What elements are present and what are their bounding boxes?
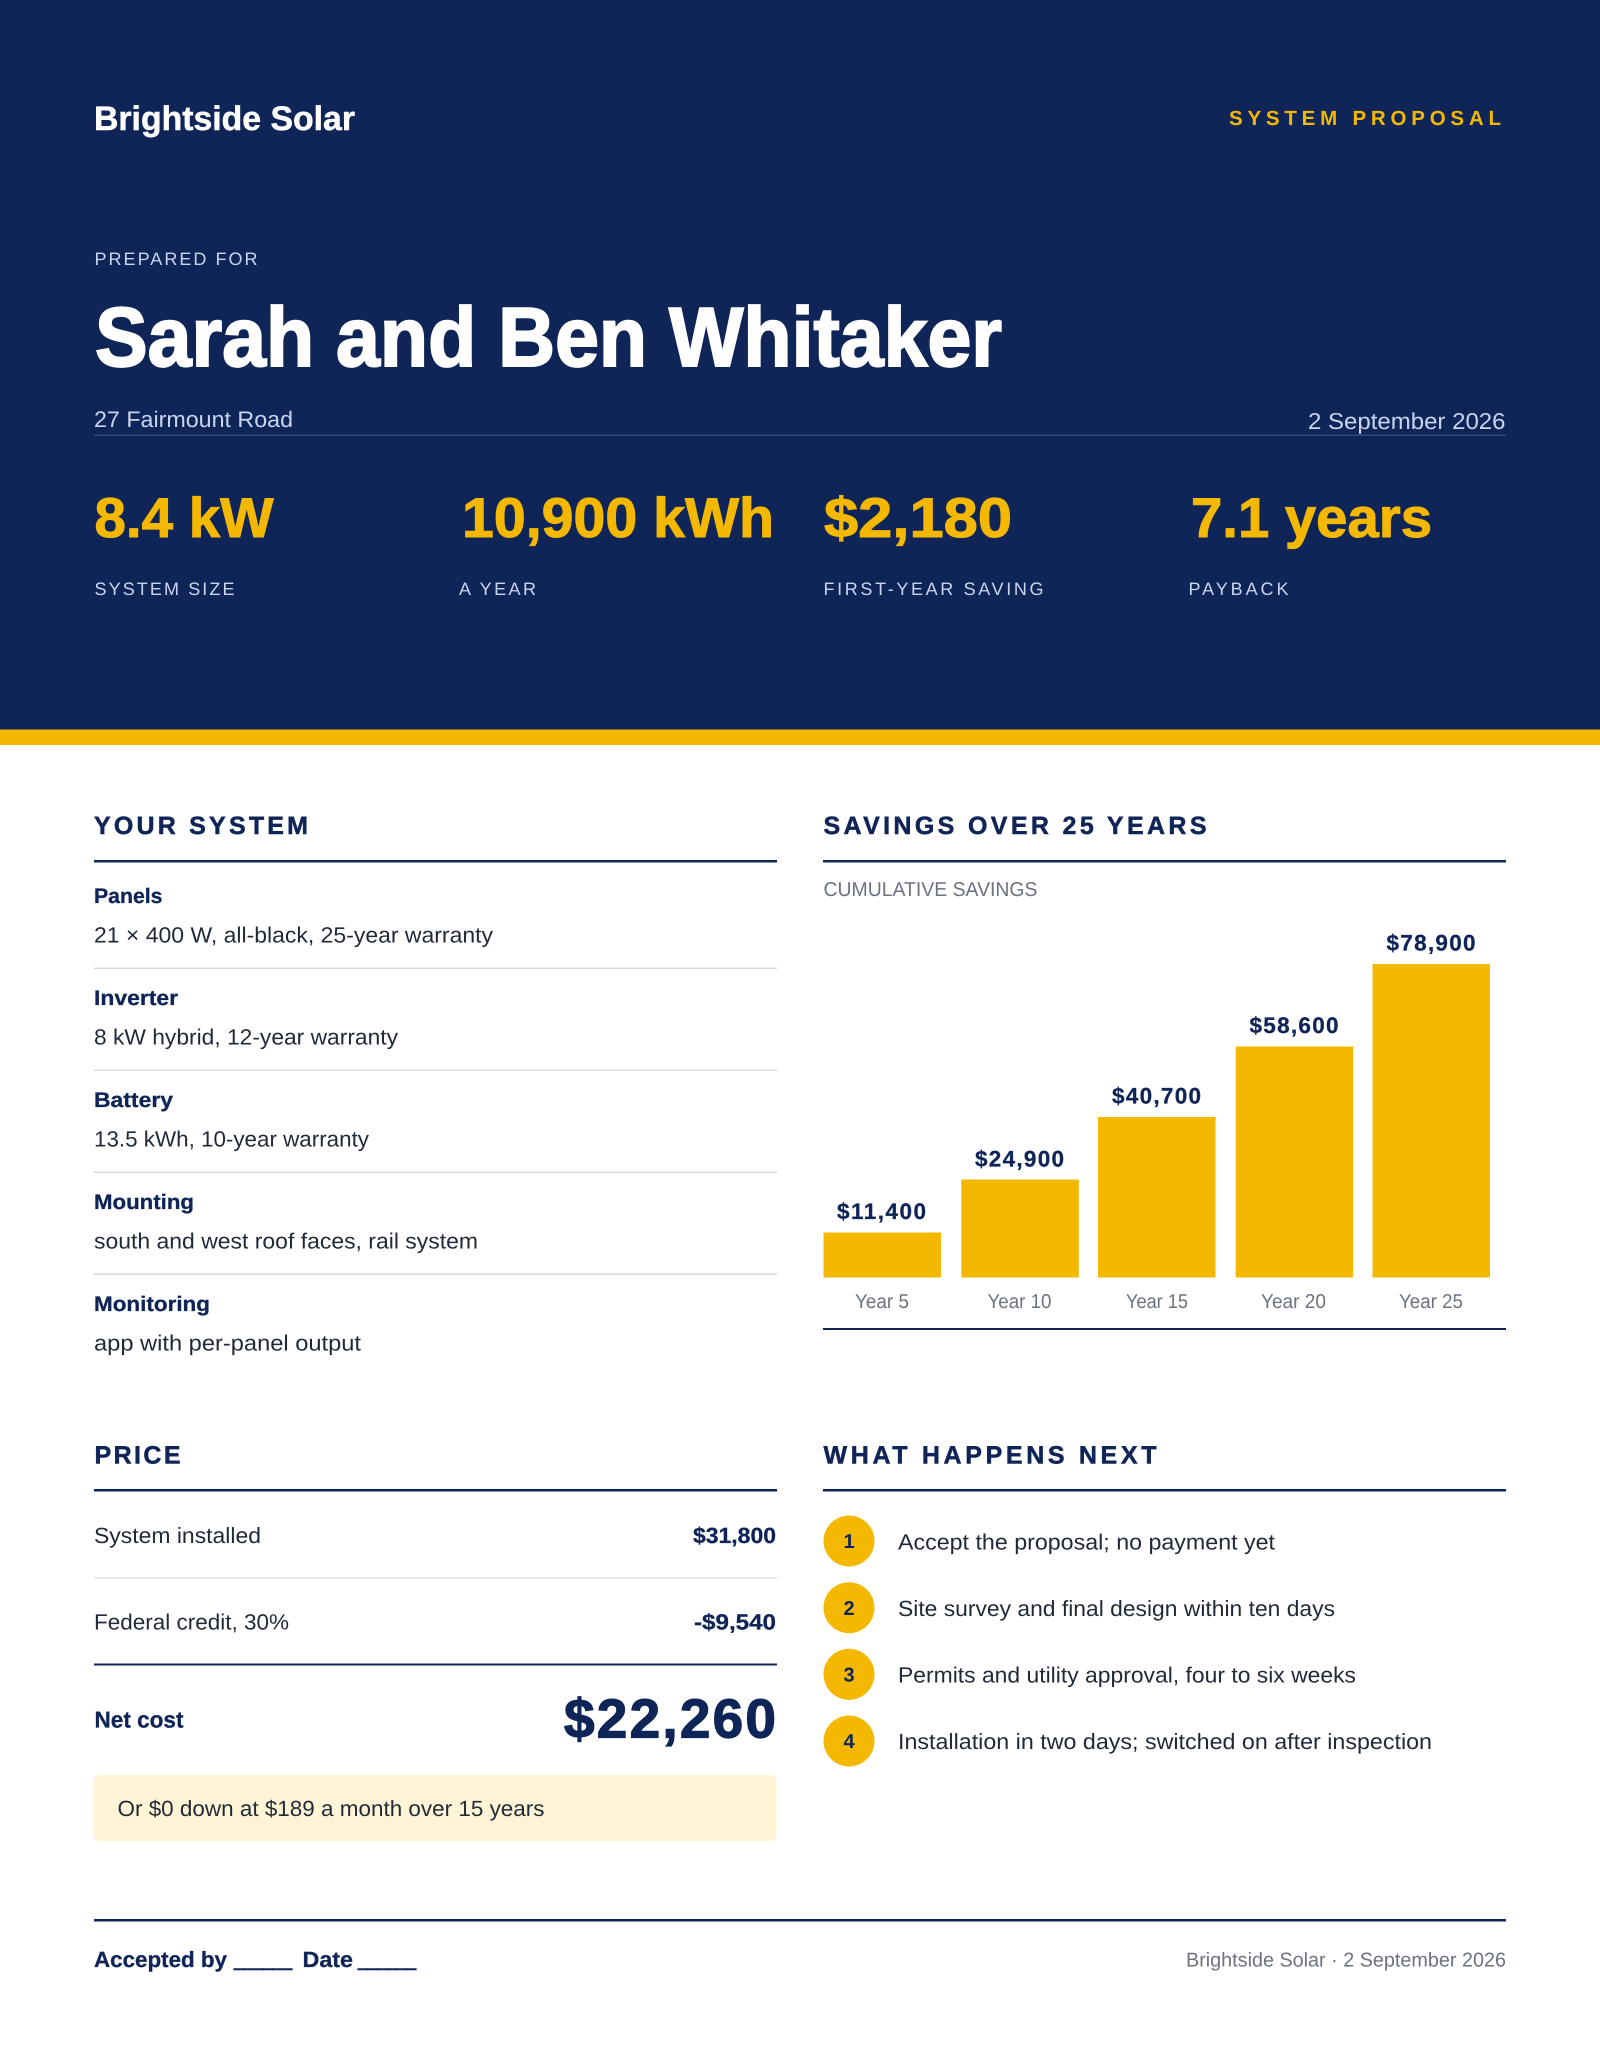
- line item: federal credit: -$9,540: [694, 1610, 776, 1634]
- spec: panels: 21 × 400 W, all-black, 25-year warranty: [94, 922, 493, 948]
- bar: year 20: [1236, 1013, 1353, 1313]
- heading: savings: SAVINGS OVER 25 YEARS: [824, 812, 1206, 840]
- bar: year 10: $24,900: [975, 1146, 1064, 1172]
- line item: system installed: [94, 1523, 776, 1548]
- customer name: Sarah and Ben Whitaker: [95, 290, 1002, 384]
- bar chart: [824, 930, 1490, 1313]
- stat: annual output: [459, 486, 774, 599]
- heading: your system: YOUR SYSTEM: [94, 812, 308, 840]
- spec: inverter: 8 kW hybrid, 12-year warranty: [94, 1024, 398, 1050]
- stat: annual output: A YEAR: [459, 579, 536, 599]
- spec: panels: [94, 885, 493, 948]
- stat: system size: SYSTEM SIZE: [94, 579, 234, 599]
- stat: payback: PAYBACK: [1188, 579, 1288, 599]
- bar: year 10: [961, 1146, 1079, 1313]
- panel: savings over 25 years: [823, 812, 1506, 1330]
- chart subtitle: CUMULATIVE SAVINGS: [824, 879, 1038, 901]
- step 3: Permits and utility approval, four to six weeks: [898, 1663, 1356, 1688]
- step 2: [824, 1582, 1335, 1633]
- bar: year 5: $11,400: [837, 1199, 926, 1224]
- panel: your system: [94, 812, 777, 1356]
- step 4: [824, 1716, 1432, 1766]
- step 1: 1: [843, 1531, 855, 1553]
- bar: year 15: Year 15: [1126, 1291, 1188, 1313]
- line item: federal credit: Federal credit, 30%: [94, 1610, 289, 1634]
- prepared for label: PREPARED FOR: [94, 249, 258, 269]
- spec: mounting: [94, 1191, 478, 1254]
- stat: first-year saving: [824, 486, 1044, 599]
- financing callout: Or $0 down at $189 a month over 15 years: [118, 1796, 544, 1821]
- stat: system size: 8.4 kW: [94, 486, 274, 549]
- bar: year 15: $40,700: [1112, 1084, 1201, 1108]
- step 2: 2: [843, 1598, 855, 1620]
- step 3: [824, 1649, 1356, 1700]
- document type label: SYSTEM PROPOSAL: [1229, 107, 1501, 130]
- step 4: Installation in two days; switched on after inspection: [898, 1729, 1432, 1754]
- footer credit: Brightside Solar · 2 September 2026: [1186, 1950, 1506, 1972]
- stat: payback: 7.1 years: [1191, 486, 1432, 549]
- bar: year 20: $58,600: [1250, 1013, 1338, 1038]
- acceptance line: Date: [302, 1947, 353, 1972]
- stat: annual output: 10,900 kWh: [462, 486, 774, 549]
- header background: [0, 0, 1600, 730]
- spec: mounting: south and west roof faces, rail system: [94, 1228, 478, 1254]
- accent band: [0, 730, 1600, 745]
- bar: year 15: [1098, 1084, 1216, 1313]
- line item: federal credit: [94, 1610, 776, 1634]
- line item: system installed: $31,800: [693, 1523, 776, 1548]
- bar: year 5: [824, 1199, 941, 1313]
- bar: year 5: Year 5: [855, 1291, 909, 1313]
- net cost: [94, 1688, 776, 1750]
- acceptance line: ______: [233, 1947, 293, 1972]
- header panel: [0, 0, 1600, 745]
- spec: inverter: Inverter: [94, 987, 178, 1010]
- step 3: 3: [843, 1664, 855, 1686]
- step 1: Accept the proposal; no payment yet: [898, 1530, 1275, 1554]
- spec: battery: Battery: [94, 1089, 173, 1112]
- spec: inverter: [94, 987, 398, 1050]
- bar: year 10: Year 10: [988, 1291, 1052, 1313]
- stat: first-year saving: $2,180: [824, 486, 1012, 549]
- heading: price: PRICE: [94, 1442, 180, 1470]
- stat: system size: [94, 486, 274, 599]
- acceptance line: ______: [357, 1947, 417, 1972]
- bar: year 25: Year 25: [1399, 1291, 1463, 1313]
- spec: mounting: Mounting: [94, 1191, 194, 1214]
- spec: monitoring: app with per-panel output: [94, 1330, 361, 1356]
- brand name: Brightside Solar: [94, 100, 355, 138]
- stat: first-year saving: FIRST-YEAR SAVING: [824, 579, 1044, 599]
- bar: year 20: Year 20: [1261, 1291, 1326, 1313]
- stat: payback: [1188, 486, 1432, 599]
- net cost: $22,260: [564, 1688, 776, 1750]
- spec: panels: Panels: [94, 885, 162, 908]
- spec: monitoring: [94, 1293, 361, 1356]
- acceptance line: Accepted by: [94, 1947, 228, 1972]
- address: 27 Fairmount Road: [94, 407, 293, 432]
- net cost: Net cost: [94, 1706, 184, 1732]
- financing callout: [94, 1775, 776, 1841]
- bar: year 25: [1372, 930, 1490, 1313]
- spec: monitoring: Monitoring: [94, 1293, 210, 1316]
- heading: what happens next: WHAT HAPPENS NEXT: [824, 1442, 1156, 1470]
- line item: system installed: System installed: [94, 1523, 261, 1548]
- step 4: 4: [843, 1731, 855, 1753]
- proposal date: 2 September 2026: [1308, 408, 1506, 434]
- panel: price: [94, 1442, 777, 1841]
- footer: [94, 1919, 1506, 1972]
- spec: battery: 13.5 kWh, 10-year warranty: [94, 1126, 369, 1152]
- panel: what happens next: [823, 1442, 1506, 1766]
- step 1: [824, 1516, 1275, 1566]
- step 2: Site survey and final design within ten days: [898, 1596, 1335, 1621]
- bar: year 25: $78,900: [1386, 930, 1476, 956]
- spec: battery: [94, 1089, 369, 1152]
- acceptance line: [94, 1947, 417, 1972]
